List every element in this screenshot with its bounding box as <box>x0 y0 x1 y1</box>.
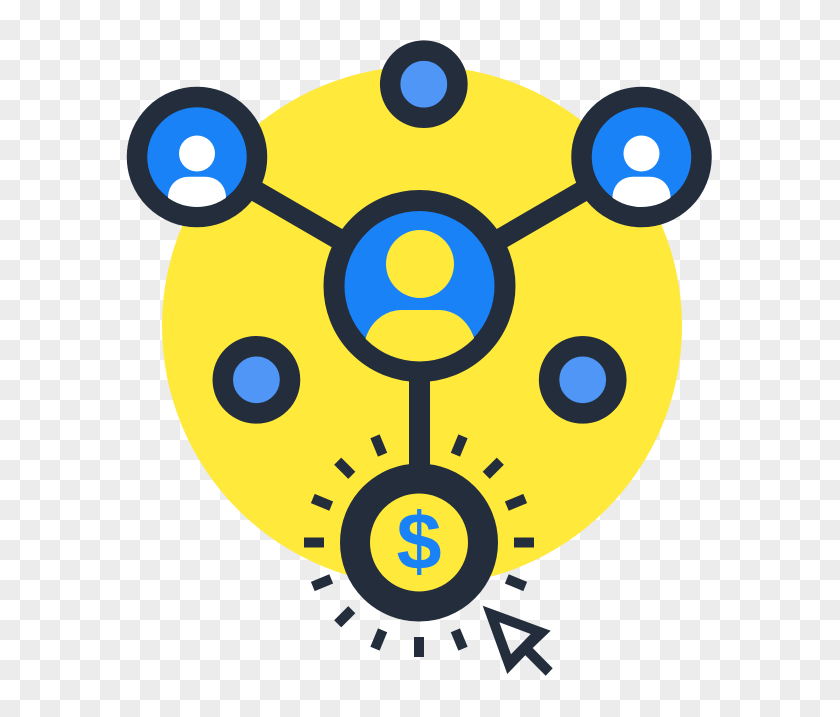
left user node <box>137 97 257 217</box>
central user head <box>386 230 454 298</box>
left user body <box>168 176 226 207</box>
dollar coin <box>355 478 483 606</box>
icon: mouse cursor arrow <box>483 606 553 676</box>
right user node <box>582 97 702 217</box>
yellow background circle <box>162 66 682 586</box>
right user head <box>624 136 660 172</box>
top small node <box>390 51 457 118</box>
lower left small node <box>223 346 290 413</box>
connector lines <box>197 157 642 542</box>
lower right small node <box>549 346 616 413</box>
right user body <box>612 176 670 207</box>
left user head <box>179 136 215 172</box>
radiating ticks around coin <box>304 436 534 657</box>
central user node <box>334 200 505 372</box>
central user body <box>366 310 474 362</box>
dollar sign: $ <box>396 497 442 587</box>
